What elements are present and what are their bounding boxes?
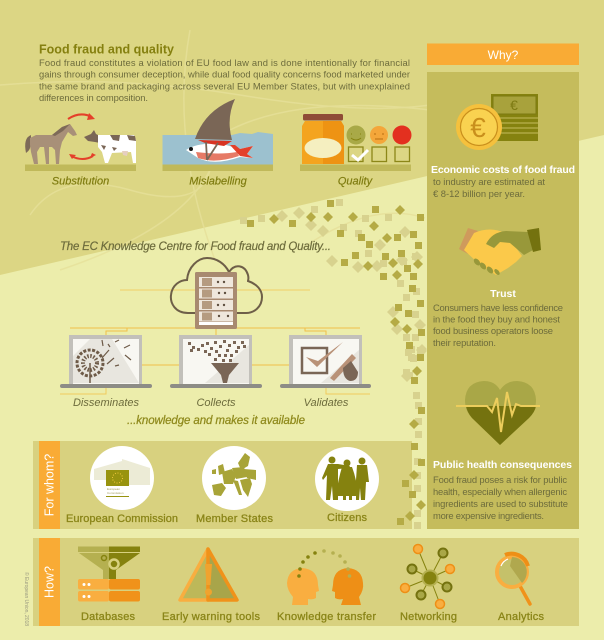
for whom heading: For whom?: [42, 454, 56, 516]
trust text: in the food they buy and honest: [433, 314, 560, 324]
diagram: connector lines: [60, 290, 370, 394]
copyright: © European Union, 2018: [23, 572, 30, 626]
label: member states: Member States: [196, 513, 274, 525]
icon: cloud with server: [171, 258, 262, 329]
economic costs text: [433, 176, 545, 199]
intro text: differences in composition.: [39, 92, 148, 103]
icon: euro coin and banknotes: [456, 94, 538, 150]
audience: european commission: Commission: [107, 491, 124, 495]
icon: substitution horse and cow: [25, 113, 136, 171]
panel: for whom: [33, 441, 412, 529]
label: substitution: Substitution: [52, 176, 109, 188]
laptop: validates: [280, 335, 371, 388]
economic costs text: to industry are estimated at: [433, 176, 545, 187]
icon: euro coin and banknotes: €: [470, 112, 486, 143]
intro text: the same brand and packaging across several EU Member States, but with unexplained: [39, 80, 410, 92]
for whom tab: [39, 441, 60, 529]
label: disseminates: Disseminates: [73, 397, 140, 409]
icon: heart with pulse: [456, 381, 540, 445]
why header: [427, 44, 579, 65]
audience: member states: [202, 446, 266, 510]
icon: quality jar and smileys: [300, 114, 412, 171]
laptop: disseminates: [60, 335, 152, 388]
how tab: [39, 538, 60, 626]
economic costs heading: Economic costs of food fraud: [431, 164, 575, 176]
label: networking: Networking: [400, 611, 457, 623]
why background: [427, 72, 579, 529]
intro text: Food fraud constitutes a violation of EU food law and is done intentionally for financial: [39, 57, 410, 68]
public health text: [433, 474, 568, 521]
label: databases: Databases: [81, 611, 136, 623]
label: early warning tools: Early warning tools: [162, 611, 260, 623]
trust text: Consumers have less confidence: [433, 302, 563, 313]
knowledge line: ...knowledge and makes it available: [127, 415, 305, 427]
why heading: Why?: [488, 48, 519, 62]
trust text: food business operators loose: [433, 325, 553, 336]
trust heading: Trust: [490, 288, 516, 300]
trust text: their reputation.: [433, 337, 496, 348]
icon: mislabelling shark fin fish: [162, 99, 273, 171]
how heading: How?: [42, 566, 56, 598]
label: mislabelling: Mislabelling: [189, 176, 248, 188]
icon: early warning triangle: [180, 549, 237, 600]
label: collects: Collects: [196, 397, 236, 409]
public health text: ingredients are used to substitute: [433, 498, 568, 509]
audience: citizens: [315, 447, 379, 511]
panel: why: [427, 44, 579, 529]
label: quality: Quality: [338, 176, 374, 188]
public health heading: Public health consequences: [433, 459, 572, 471]
icon: analytics magnifier: [497, 554, 530, 604]
icon: knowledge transfer heads: [287, 549, 363, 605]
label: european commission: European Commission: [66, 513, 178, 525]
panel: how: [33, 538, 579, 626]
decorative scattered squares: [240, 199, 428, 529]
audience: european commission: European: [107, 487, 120, 491]
public health text: health, especially when allergenic: [433, 486, 567, 497]
trust text: [433, 302, 563, 348]
label: analytics: Analytics: [498, 611, 544, 623]
economic costs text: € 8-12 billion per year.: [433, 188, 525, 199]
title: Food fraud and quality: [39, 42, 174, 56]
icon: databases: [78, 546, 140, 602]
public health text: more expensive ingredients.: [433, 510, 544, 521]
public health text: Food fraud poses a risk for public: [433, 474, 567, 485]
intro text: gains through consumer deception, while dual food quality concerns food marketed under: [39, 68, 410, 80]
label: validates: Validates: [304, 397, 349, 409]
label: citizens: Citizens: [327, 512, 368, 524]
heading: EC Knowledge Centre: The EC Knowledge Centre for Food fraud and Quality...: [60, 241, 331, 253]
laptop: collects: [170, 335, 262, 388]
icon: euro coin and banknotes: €: [510, 97, 518, 113]
audience: european commission: [90, 446, 154, 510]
icon: networking: [400, 544, 454, 608]
icon: handshake: [459, 228, 541, 276]
intro text: [39, 57, 410, 103]
label: knowledge transfer: Knowledge transfer: [277, 611, 376, 623]
